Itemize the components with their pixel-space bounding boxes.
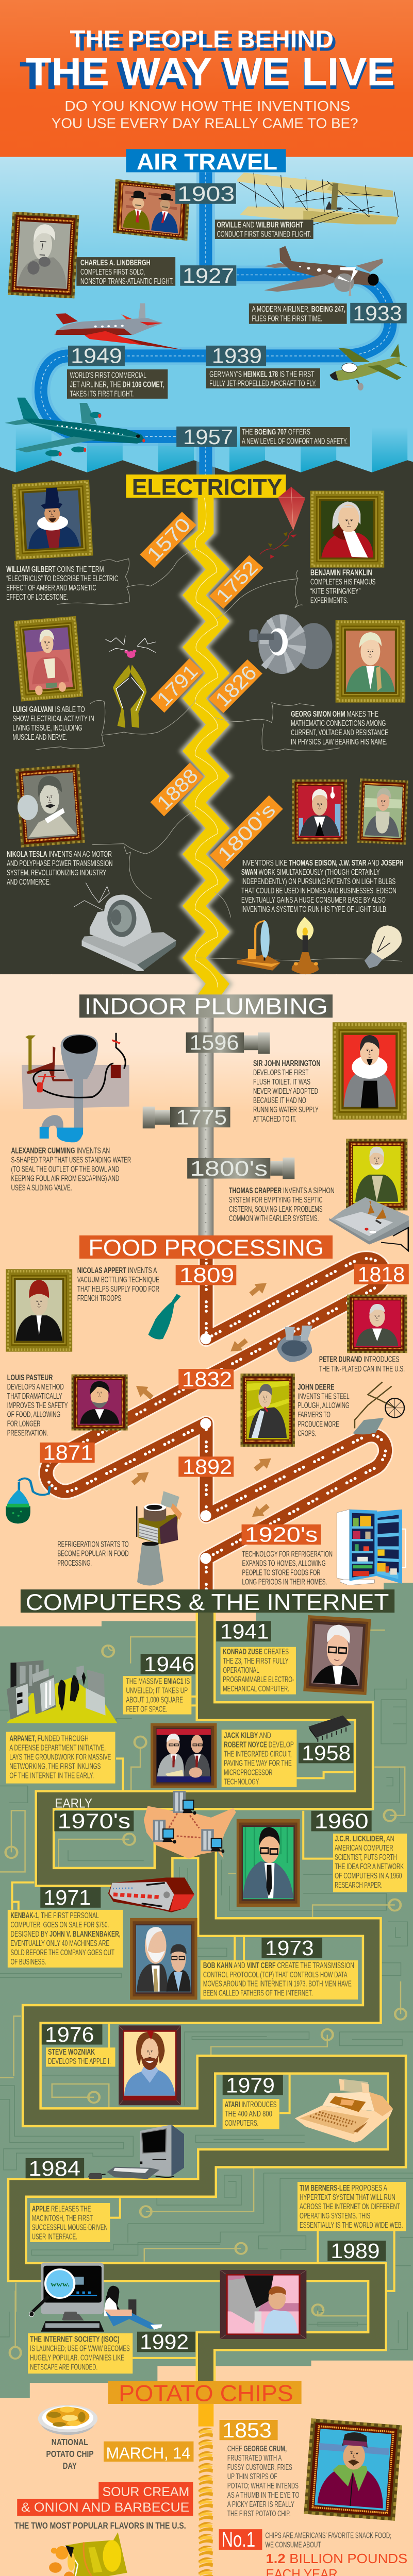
- text: luigi galvani: LIVING TISSUE, INCLUDING: [13, 723, 82, 733]
- portrait: konrad zuse: [303, 1615, 371, 1695]
- caption: boeing 247: [249, 303, 347, 324]
- year 1976: 1976: [45, 2023, 94, 2046]
- portrait: peter durand: [347, 1295, 407, 1353]
- caption: arpanet: [6, 1732, 115, 1784]
- caption: comet: WORLD'S FIRST COMMERCIAL: [70, 370, 146, 380]
- text: nicolas appert: NICOLAS APPERT INVENTS A: [77, 1266, 157, 1275]
- caption: boeing 707: THE BOEING 707 OFFERS: [242, 428, 310, 436]
- section: electricity: [6, 474, 408, 996]
- year 1775 with pipe fitting: 1775: [176, 1105, 227, 1129]
- year 1871: 1871: [43, 1441, 93, 1465]
- text: william gilbert: “ELECTRICUS” TO DESCRIBE THE ELECTRIC: [6, 574, 118, 583]
- text: sir john harrington: [253, 1059, 320, 1123]
- text: georg ohm: [291, 709, 388, 747]
- text: nikola tesla: SYSTEM, REVOLUTIONIZING INDUSTRY: [7, 868, 106, 877]
- caption: boeing 707: [240, 427, 350, 447]
- text: john deere: INVENTS THE STEEL: [298, 1392, 350, 1401]
- caption: comet: JET AIRLINER, THE DH 106 COMET,: [70, 380, 164, 389]
- year 1927: 1927: [183, 264, 234, 287]
- subtitle: [52, 98, 358, 131]
- caption: kilby and noyce: TECHNOLOGY.: [224, 1777, 260, 1786]
- illustration: tin cans: [277, 1326, 312, 1362]
- year 1752: 1752: [211, 557, 262, 606]
- portrait: george crum: [304, 2418, 402, 2521]
- portrait: wright brothers: [113, 179, 190, 241]
- caption: atari: ATARI INTRODUCES: [225, 2100, 277, 2109]
- text: home refrigeration: EXPANDS TO HOMES, ALLOWING: [242, 1558, 326, 1568]
- wire squiggles: [57, 548, 303, 619]
- caption: licklider: [333, 1834, 407, 1892]
- year 1570: 1570: [142, 514, 195, 566]
- year 1989: 1989: [331, 2239, 380, 2263]
- portrait: joseph swan: [357, 778, 408, 845]
- text: luigi galvani: [13, 705, 94, 742]
- caption: boeing 247: A MODERN AIRLINER, BOEING 247,: [252, 304, 345, 314]
- section: computers and the internet: [0, 1589, 413, 2381]
- text: benjamin franklin: [310, 568, 375, 605]
- caption: kenbak-1: OF BUSINESS.: [10, 1957, 46, 1966]
- circuit timeline path: [17, 1613, 397, 2381]
- caption: kahn and cerf: [201, 1960, 358, 1999]
- label: no.1: No.1: [222, 2528, 255, 2551]
- text: george crum: AS A THUMB IN THE EYE TO: [227, 2490, 300, 2499]
- portrait: william gilbert: [12, 480, 93, 560]
- illustration: www monitor: [31, 2263, 104, 2320]
- caption: eniac: UNVEILED; IT TAKES UP: [126, 1686, 188, 1695]
- caption: kahn and cerf: BEEN CALLED FATHERS OF THE INTERNET.: [203, 1989, 313, 1997]
- caption: konrad zuse: OPERATIONAL: [223, 1666, 259, 1675]
- illustration: flask body: [6, 1489, 30, 1523]
- portrait: nikola tesla: [14, 764, 85, 848]
- year 1949: 1949: [71, 344, 122, 368]
- caption: arpanet: A DEFENSE DEPARTMENT INITIATIVE,: [9, 1743, 106, 1752]
- caption: eniac: THE MASSIVE ENIAC1 IS: [126, 1677, 190, 1686]
- text: sir john harrington: SIR JOHN HARRINGTON: [253, 1059, 320, 1067]
- subtitle: DO YOU KNOW HOW THE INVENTIONS: [64, 98, 350, 114]
- portrait: harrington: [333, 1022, 407, 1120]
- text: alexander cumming: (TO SEAL THE OUTLET OF THE BOWL AND: [11, 1164, 119, 1174]
- caption: kilby and noyce: [222, 1730, 296, 1787]
- wire squiggles: [36, 700, 402, 961]
- caption: kenbak-1: [8, 1910, 123, 1968]
- illustration: woman legs: [104, 2310, 162, 2330]
- text: national potato chip day: [46, 2437, 94, 2471]
- portrait: benjamin franklin: [310, 490, 384, 568]
- illustration: heinkel jet: [329, 344, 407, 391]
- label: sour cream: [98, 2482, 193, 2500]
- illustration: sink: [329, 1197, 409, 1251]
- text: home refrigeration: LONG PERIODS IN THEIR HOMES.: [242, 1577, 327, 1586]
- section: air travel: [5, 149, 407, 490]
- text: nicolas appert: VACUUM BOTTLING TECHNIQUE: [77, 1275, 159, 1284]
- main pipe: [199, 1018, 213, 1236]
- caption: arpanet: NETWORKING, THE FIRST INKLINGS: [9, 1761, 101, 1771]
- heading: indoor plumbing: INDOOR PLUMBING: [85, 994, 328, 1019]
- text: favorite snack: [266, 2531, 391, 2549]
- caption: arpanet: LAYS THE GROUNDWORK FOR MASSIVE: [9, 1752, 111, 1761]
- text: george crum: UP THIN STRIPS OF: [227, 2472, 277, 2481]
- year 1933: 1933: [353, 301, 402, 325]
- text: refrigeration: PROCESSING.: [58, 1558, 92, 1567]
- text: nikola tesla: AND POLYPHASE POWER TRANSMISSION: [7, 859, 112, 868]
- caption: kilby and noyce: JACK KILBY AND: [224, 1731, 271, 1740]
- caption: konrad zuse: [221, 1647, 296, 1694]
- text: national potato chip day: DAY: [63, 2461, 77, 2471]
- text: john deere: [298, 1382, 350, 1438]
- text: louis pasteur: DEVELOPS A METHOD: [7, 1382, 64, 1391]
- text: national potato chip day: POTATO CHIP: [46, 2449, 94, 2459]
- illustration: chip bowl: [38, 2405, 97, 2435]
- caption: konrad zuse: KONRAD ZUSE CREATES: [223, 1647, 289, 1656]
- caption: internet society: THE INTERNET SOCIETY (ISOC): [30, 2334, 120, 2344]
- illustration: kite: [260, 487, 305, 559]
- label: no.1: [219, 2528, 262, 2551]
- text: benjamin franklin: “KITE STRING/KEY”: [310, 586, 360, 596]
- text: national potato chip day: NATIONAL: [52, 2437, 88, 2447]
- illustration: turbine: [249, 614, 332, 674]
- year 1892: 1892: [183, 1455, 232, 1479]
- caption: kilby and noyce: THE INTEGRATED CIRCUIT,: [224, 1749, 292, 1758]
- caption: internet society: [28, 2333, 133, 2374]
- year early 1970s: 1970's: [58, 1809, 130, 1833]
- yellow connector traces: [116, 1697, 353, 1859]
- caption: steve wozniak: [46, 2047, 115, 2066]
- chip stack timeline: [198, 2404, 214, 2576]
- caption: internet society: HUGELY POPULAR. COMPANIES LIKE: [30, 2353, 124, 2362]
- text: george crum: POTATO; WHAT HE INTENDS: [227, 2481, 299, 2490]
- year 1957: 1957: [183, 425, 233, 449]
- text: louis pasteur: LOUIS PASTEUR: [7, 1373, 53, 1382]
- text: luigi galvani: MUSCLE AND NERVE.: [13, 733, 67, 742]
- portrait: thomas edison: [292, 779, 347, 844]
- caption: eniac: ABOUT 1,000 SQUARE: [126, 1696, 183, 1704]
- conveyor timeline: [46, 1259, 386, 1590]
- text: william gilbert: WILLIAM GILBERT COINS THE TERM: [6, 565, 104, 573]
- year 1946: 1946: [144, 1652, 194, 1676]
- illustration: woman with laptop: [104, 2286, 136, 2317]
- caption: kenbak-1: EVENTUALLY ONLY 40 MACHINES ARE: [10, 1939, 109, 1947]
- year 1800s: 1800's: [213, 799, 280, 866]
- caption: wright brothers: ORVILLE AND WILBUR WRIGHT: [217, 220, 303, 229]
- background circuit traces: [0, 1630, 413, 2359]
- caption: lindbergh: COMPLETES FIRST SOLO,: [80, 267, 145, 277]
- portrait: luigi galvani: [14, 616, 83, 702]
- text: george crum: CHEF GEORGE CRUM,: [227, 2444, 287, 2453]
- label: sour cream: SOUR CREAM: [102, 2485, 189, 2499]
- text: thomas crapper: COMMON WITH EARLIER SYSTEMS.: [229, 1214, 319, 1223]
- portrait: georg ohm: [336, 620, 405, 703]
- illustration: www monitor: www.: [51, 2281, 70, 2288]
- year 1992: 1992: [140, 2330, 189, 2353]
- caption: arpanet: OF THE INTERNET IN THE EARLY.: [9, 1771, 94, 1780]
- text: john deere: PLOUGH, ALLOWING: [298, 1401, 350, 1410]
- caption: boeing 247: FLIES FOR THE FIRST TIME.: [252, 314, 322, 323]
- text: benjamin franklin: EXPERIMENTS.: [310, 596, 348, 605]
- title line 1: THE PEOPLE BEHIND: [74, 29, 337, 56]
- text: alexander cumming: ALEXANDER CUMMING INVENTS AN: [11, 1146, 110, 1155]
- text: alexander cumming: KEEPING FOUL AIR FROM ESCAPING) AND: [11, 1174, 119, 1183]
- illustration: us network map: [144, 1791, 236, 1859]
- direction arrows: [131, 1283, 271, 1517]
- illustration: frog legs: [113, 665, 146, 728]
- year 1596 with pipe fitting: [186, 1030, 270, 1054]
- text: alexander cumming: USES A SLIDING VALVE.: [11, 1183, 72, 1192]
- caption: apple macintosh: USER INTERFACE.: [32, 2232, 77, 2241]
- text: william gilbert: EFFECT OF LODESTONE.: [6, 592, 68, 601]
- year 1939: 1939: [212, 344, 262, 368]
- illustration: macintosh: [88, 2125, 184, 2179]
- illustration: eniac room: [7, 1660, 118, 1723]
- caption: tim berners-lee: [298, 2182, 406, 2291]
- caption: konrad zuse: MECHANICAL COMPUTER.: [223, 1684, 289, 1693]
- illustration: atari computer: [295, 2079, 393, 2143]
- stat: 1.2 billion pounds: [266, 2551, 407, 2576]
- year 1960: 1960: [315, 1809, 369, 1833]
- caption: comet: TAKES ITS FIRST FLIGHT.: [70, 389, 134, 398]
- text: refrigeration: [58, 1539, 129, 1567]
- text: george crum: FRUSTRATED WITH A: [227, 2453, 282, 2462]
- caption: internet society: NETSCAPE ARE FOUNDED.: [30, 2362, 97, 2371]
- text: sir john harrington: BECAUSE IT HAD NO: [253, 1096, 306, 1105]
- text: john deere: PRODUCE MORE: [298, 1419, 339, 1429]
- year 1958: 1958: [302, 1741, 351, 1765]
- portrait: kahn and cerf: [130, 1918, 197, 1999]
- year 1832: 1832: [182, 1367, 232, 1391]
- year 1809: 1809: [179, 1263, 234, 1287]
- caption: atari: THE 400 AND 800: [225, 2109, 272, 2118]
- illustration: refrigerator: [337, 1510, 406, 1585]
- illustration: early lamps: [237, 917, 402, 974]
- caption: kenbak-1: COMPUTER, GOES ON SALE FOR $750.: [10, 1920, 109, 1929]
- caption: konrad zuse: PROGRAMMABLE ELECTRO-: [223, 1675, 294, 1684]
- caption: heinkel: [206, 368, 320, 388]
- text: alexander cumming: [11, 1146, 131, 1192]
- year 1979: 1979: [226, 2073, 275, 2097]
- caption: kilby and noyce: ROBERT NOYCE DEVELOP: [224, 1740, 294, 1749]
- label: onion and barbecue: & ONION AND BARBECUE: [21, 2500, 189, 2515]
- portrait: tim berners-lee: [220, 2270, 306, 2339]
- illustration: monitor base and keyboard: [29, 2312, 104, 2332]
- text: thomas crapper: CISTERN, SOLVING LEAK PROBLEMS: [229, 1205, 323, 1213]
- text: john deere: JOHN DEERE: [298, 1382, 335, 1392]
- caption: kilby and noyce: MICROPROCESSOR: [224, 1768, 272, 1777]
- text: nikola tesla: [7, 850, 112, 886]
- title line 1: THE PEOPLE BEHIND: [70, 26, 334, 53]
- text: sir john harrington: NEVER WIDELY ADOPTED: [253, 1087, 318, 1095]
- air travel road: [41, 172, 390, 490]
- text: favorite snack: WE CONSUME ABOUT: [266, 2540, 321, 2549]
- heading: food processing: FOOD PROCESSING: [88, 1235, 324, 1261]
- caption: internet society: IS LAUNCHED; USE OF WWW BECOMES: [30, 2344, 130, 2353]
- year 1853: 1853: [222, 2418, 272, 2442]
- text: john deere: FARMERS TO: [298, 1410, 331, 1419]
- section: food processing: [6, 1235, 409, 1590]
- heading: potato chips: POTATO CHIPS: [119, 2381, 293, 2406]
- illustration: bottle: [148, 1294, 181, 1340]
- title block: [20, 26, 396, 131]
- caption: kenbak-1: DESIGNED BY JOHN V. BLANKENBAKER,: [10, 1929, 121, 1938]
- caption: eniac: FEET OF SPACE.: [126, 1705, 167, 1714]
- text: nikola tesla: AND COMMERCE.: [7, 877, 51, 886]
- caption: apple macintosh: MACINTOSH, THE FIRST: [32, 2214, 93, 2223]
- year 1979: [223, 2073, 290, 2113]
- text: alexander cumming: S-SHAPED TRAP THAT USES STANDING WATER: [11, 1155, 131, 1164]
- text: louis pasteur: PRESERVATION.: [7, 1429, 48, 1437]
- caption: apple macintosh: APPLE RELEASES THE: [32, 2205, 91, 2213]
- portrait: lindbergh: [8, 212, 79, 298]
- caption: arpanet: ARPANET, FUNDED THROUGH: [9, 1734, 89, 1743]
- caption: lindbergh: [76, 257, 175, 286]
- caption: atari: COMPUTERS.: [225, 2119, 258, 2127]
- year 1971: [12, 1883, 101, 1910]
- year 1973: [235, 1936, 322, 1961]
- text: sir john harrington: FLUSH TOILET. IT WAS: [253, 1077, 310, 1086]
- text: nicolas appert: THAT HELPS SUPPLY FOOD FOR: [77, 1284, 159, 1294]
- illustration: refrigeration machine: [136, 1491, 182, 1586]
- text: louis pasteur: THAT DRAMATICALLY: [7, 1392, 62, 1400]
- text: peter durand: [319, 1355, 405, 1374]
- text: edison swan: [241, 858, 404, 914]
- year 1941: 1941: [220, 1619, 269, 1643]
- heading: electricity: ELECTRICITY: [132, 474, 282, 500]
- text: george crum: [227, 2444, 300, 2518]
- section: potato chips: [14, 2381, 407, 2576]
- caption: wright brothers: [215, 219, 313, 239]
- illustration: chip bag: [49, 2532, 127, 2576]
- text: refrigeration: REFRIGERATION STARTS TO: [58, 1539, 129, 1549]
- text: sir john harrington: ATTACHED TO IT.: [253, 1114, 296, 1123]
- text: sir john harrington: DEVELOPS THE FIRST: [253, 1068, 309, 1077]
- illustration: pink heart knot: [106, 636, 156, 658]
- text: sir john harrington: RUNNING WATER SUPPLY: [253, 1105, 319, 1114]
- portrait: john deere: [240, 1374, 295, 1447]
- illustration: plough: [353, 1382, 404, 1434]
- text: louis pasteur: IMPROVES THE SAFETY: [7, 1401, 68, 1410]
- caption: eniac: [123, 1676, 191, 1715]
- heading: air travel: AIR TRAVEL: [137, 149, 277, 175]
- illustration: kenbak-1: [108, 1877, 194, 1912]
- text: home refrigeration: [242, 1549, 333, 1586]
- text: louis pasteur: FOR LONGER: [7, 1419, 40, 1428]
- year 1800s with pipe fitting: 1800's: [190, 1157, 268, 1180]
- caption: konrad zuse: THE Z3, THE FIRST FULLY: [223, 1656, 289, 1666]
- caption: kilby and noyce: PAVING THE WAY FOR THE: [224, 1758, 292, 1768]
- year 1775 with pipe fitting: [143, 1105, 230, 1129]
- caption: kenbak-1: KENBAK-1, THE FIRST PERSONAL: [10, 1911, 99, 1920]
- caption: wright brothers: CONDUCT FIRST SUSTAINED FLIGHT.: [217, 229, 311, 239]
- portrait: steve wozniak: [119, 2025, 181, 2105]
- illustration: wright flyer: [237, 173, 398, 226]
- text: nicolas appert: FRENCH TROOPS.: [77, 1294, 123, 1303]
- text: georg ohm: GEORG SIMON OHM MAKES THE: [291, 709, 378, 719]
- text: refrigeration: BECOME POPULAR IN FOOD: [58, 1549, 129, 1558]
- caption: steve wozniak: DEVELOPS THE APPLE I.: [48, 2057, 111, 2066]
- year early 1970s: [54, 1797, 134, 1833]
- illustration: comet airliner: [54, 303, 182, 350]
- caption: heinkel: FULLY JET-PROPELLED AIRCRAFT TO FLY.: [209, 379, 317, 388]
- text: george crum: THE FIRST POTATO CHIP.: [227, 2509, 291, 2518]
- illustration: flask: [19, 1479, 49, 1496]
- portrait: thomas crapper: [346, 1139, 407, 1210]
- lightning bolt timeline: [179, 498, 233, 996]
- text: william gilbert: EFFECT OF AMBER AND MAGNETIC: [6, 583, 96, 592]
- year 1791: 1791: [153, 660, 202, 710]
- text: louis pasteur: OF FOOD, ALLOWING: [7, 1410, 60, 1419]
- year 1984: 1984: [28, 2157, 80, 2180]
- text: george crum: FUSSY CUSTOMER, FRIES: [227, 2463, 292, 2471]
- text: thomas crapper: [229, 1186, 335, 1223]
- caption: lindbergh: NONSTOP TRANS-ATLANTIC FLIGHT.: [80, 277, 174, 286]
- caption: apple macintosh: [30, 2198, 120, 2242]
- illustration: boeing 707: [5, 398, 145, 456]
- illustration: ac motor: [74, 883, 176, 971]
- text: john deere: CROPS.: [298, 1429, 316, 1438]
- caption: lindbergh: CHARLES A. LINDBERGH: [80, 258, 151, 267]
- date: march 14: MARCH, 14: [106, 2444, 190, 2462]
- text: home refrigeration: PEOPLE TO STORE FOODS FOR: [242, 1568, 320, 1577]
- year 1971: 1971: [43, 1886, 91, 1909]
- caption: steve wozniak: STEVE WOZNIAK: [48, 2047, 95, 2057]
- text: william gilbert: [6, 565, 118, 601]
- portrait: louis pasteur: [72, 1375, 128, 1431]
- year early 1970s: EARLY: [55, 1797, 92, 1811]
- illustration: microchip: [308, 1716, 351, 1742]
- text: luigi galvani: LUIGI GALVANI IS ABLE TO: [13, 705, 85, 714]
- text: popular flavors: THE TWO MOST POPULAR FLAVORS IN THE U.S.: [14, 2521, 186, 2531]
- text: george crum: A PICKY EATER IS REALLY: [227, 2500, 294, 2509]
- section: indoor plumbing: [11, 994, 409, 1251]
- text: nikola tesla: NIKOLA TESLA INVENTS AN AC MOTOR: [7, 850, 112, 858]
- text: nicolas appert: [77, 1266, 159, 1303]
- text: thomas crapper: SYSTEM FOR EMPTYING THE SEPTIC: [229, 1195, 323, 1204]
- caption: comet: [67, 369, 168, 399]
- portrait: kilby and noyce: [151, 1723, 217, 1788]
- year 1826: 1826: [210, 661, 261, 711]
- illustration: s-trap toilet: [22, 1033, 129, 1142]
- text: luigi galvani: SHOW ELECTRICAL ACTIVITY IN: [13, 714, 94, 723]
- text: louis pasteur: [7, 1373, 68, 1437]
- caption: apple macintosh: SUCCESSFUL MOUSE-DRIVEN: [32, 2223, 108, 2232]
- text: thomas crapper: THOMAS CRAPPER INVENTS A SIPHON: [229, 1186, 335, 1195]
- year 1973: 1973: [265, 1936, 314, 1960]
- portrait: nicolas appert: [6, 1269, 72, 1352]
- year 1596 with pipe fitting: 1596: [189, 1030, 239, 1054]
- caption: kenbak-1: SOLD BEFORE THE COMPANY GOES OUT: [10, 1948, 114, 1957]
- portrait: licklider: [237, 1819, 300, 1907]
- caption: heinkel: GERMANY'S HEINKEL 178 IS THE FIRST: [209, 369, 315, 379]
- year 1920s: 1920's: [245, 1523, 318, 1547]
- year 1888: 1888: [153, 764, 202, 814]
- caption: atari: [223, 2099, 279, 2129]
- illustration: boeing 247: [265, 246, 383, 296]
- year 1903: 1903: [177, 182, 235, 206]
